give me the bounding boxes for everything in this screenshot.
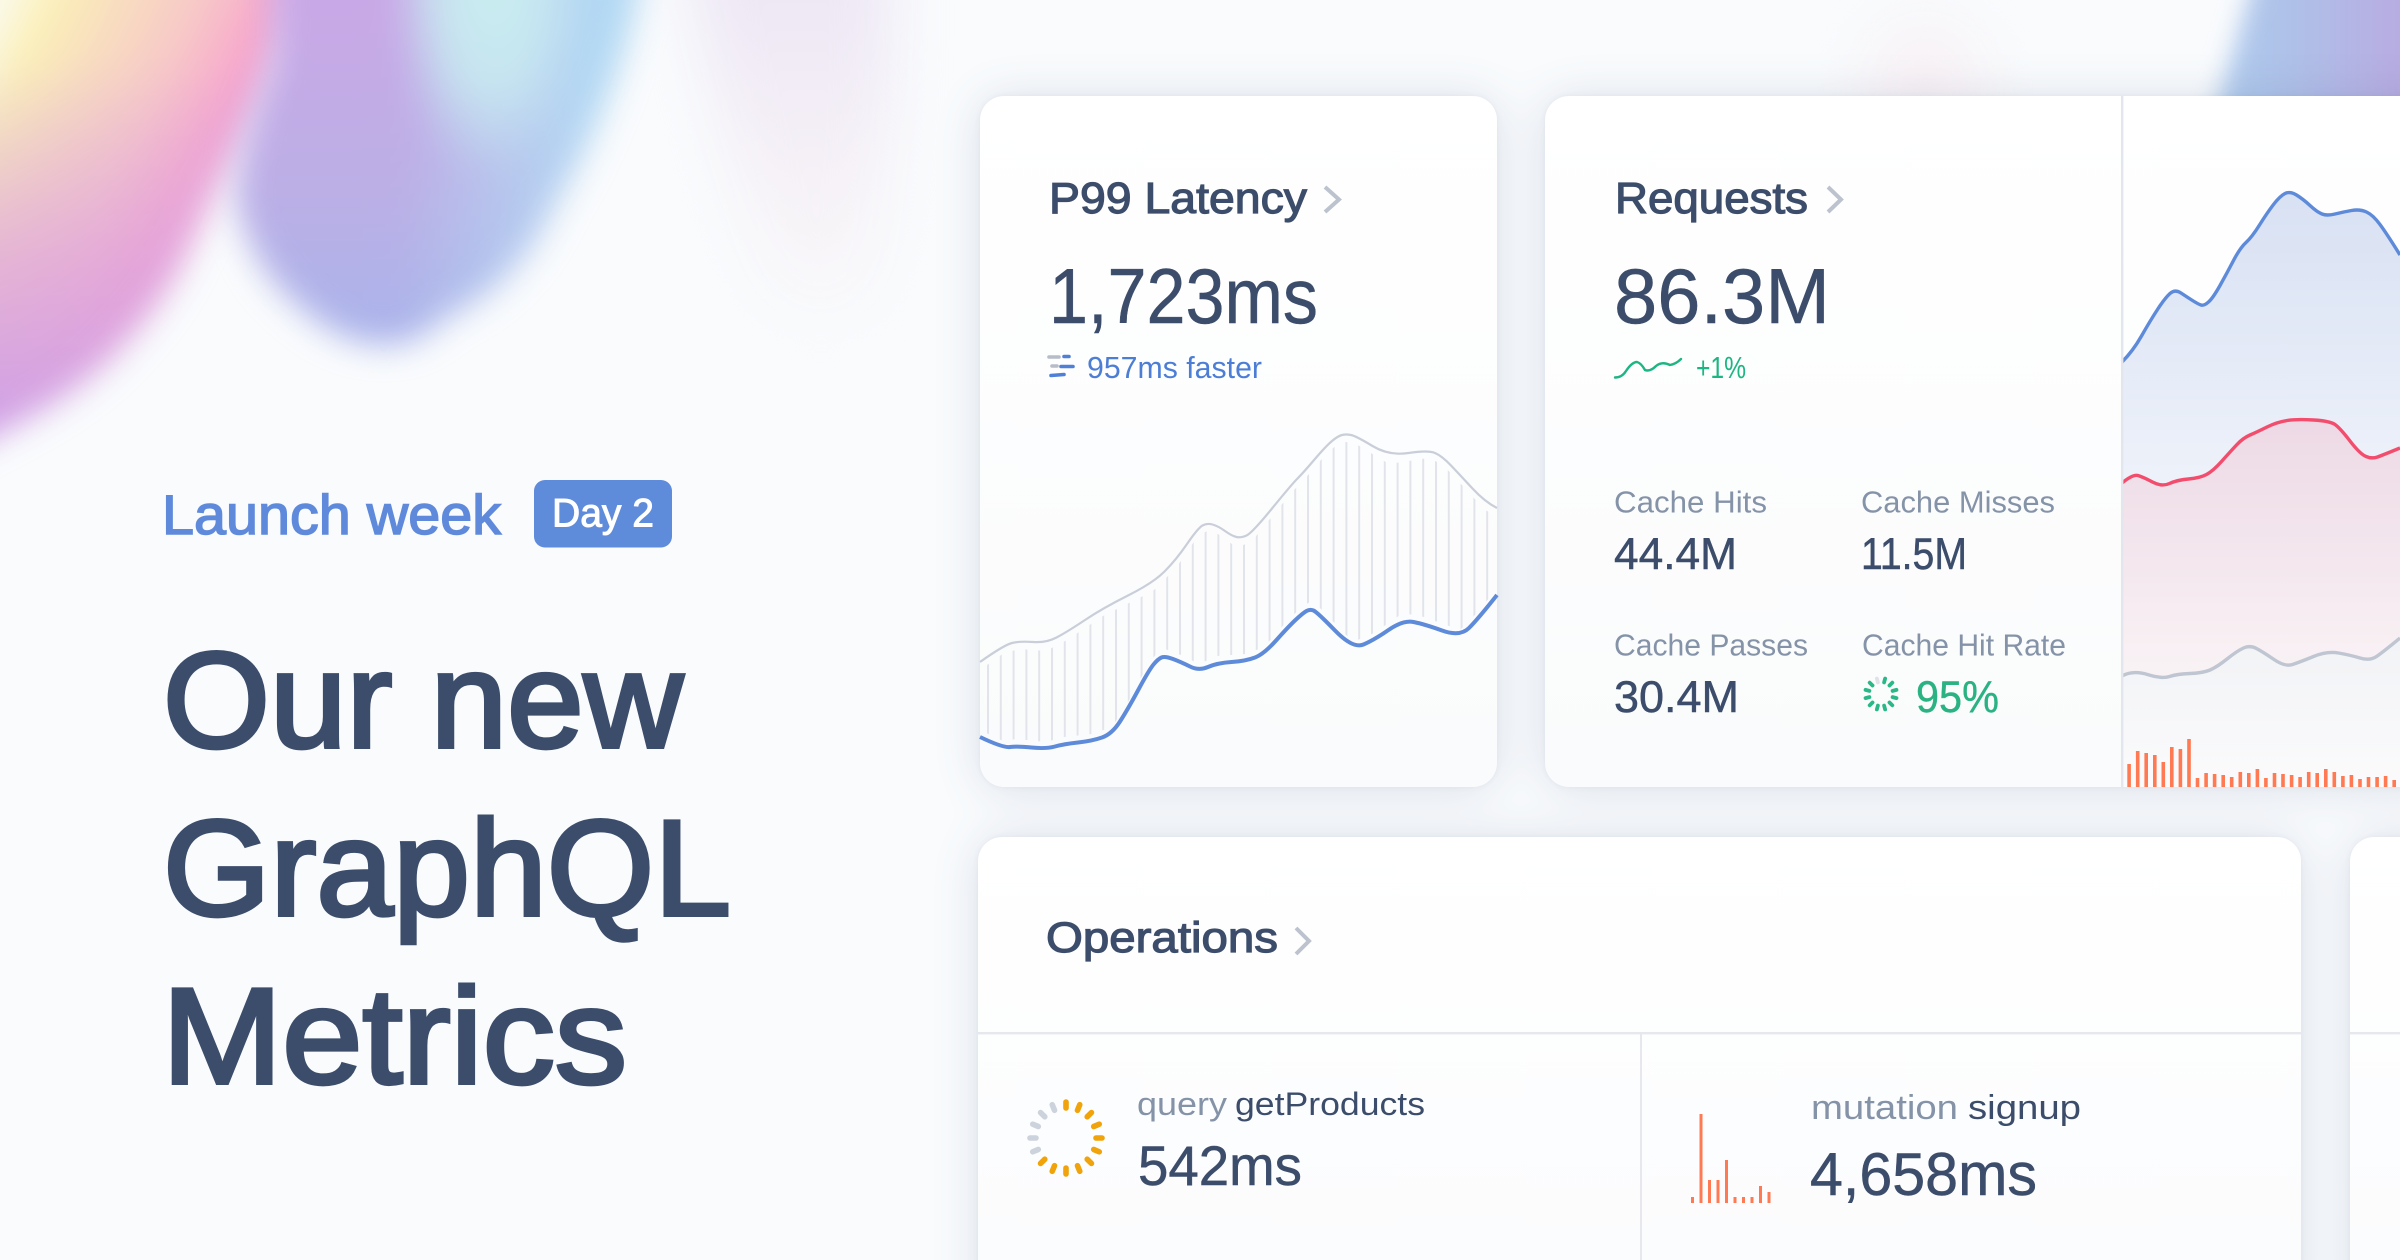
panel: operations bbox=[978, 837, 2301, 1260]
metric: cache passes: Cache Passes bbox=[1614, 628, 1808, 663]
panel: requests bbox=[1545, 96, 2400, 787]
stat: 4,658ms: 4,658ms bbox=[1810, 1141, 2037, 1208]
metric: cache hits bbox=[1614, 485, 1767, 579]
heading: operations: Operations bbox=[1046, 914, 1278, 962]
title: GraphQL bbox=[163, 792, 731, 944]
metric: cache misses bbox=[1861, 485, 2055, 579]
title: Our new bbox=[163, 624, 684, 776]
operation name: query getProducts: getProducts bbox=[1235, 1086, 1425, 1122]
heading: requests: Requests bbox=[1615, 174, 1808, 223]
operation name: query getProducts: query bbox=[1137, 1086, 1227, 1122]
chart: requests area bbox=[2122, 193, 2400, 787]
title bbox=[162, 624, 731, 1112]
metric: cache hits: 44.4M bbox=[1614, 530, 1737, 579]
operation name: query getProducts bbox=[1137, 1086, 1425, 1122]
delta: plus one percent: +1% bbox=[1696, 350, 1746, 385]
title: Metrics bbox=[162, 960, 627, 1112]
eyebrow: launch week: Launch week bbox=[162, 483, 502, 546]
metric: cache misses: 11.5M bbox=[1861, 530, 1967, 579]
gradient blob: blue and purple top right bbox=[2195, 0, 2400, 180]
operation name: mutation signup: signup bbox=[1968, 1089, 2081, 1127]
metric: cache misses: Cache Misses bbox=[1861, 485, 2055, 520]
operation name: mutation signup bbox=[1811, 1089, 2081, 1127]
gradient blob: faint pink above requests card bbox=[1865, 20, 1985, 160]
icon: green sparkline bbox=[1615, 359, 1681, 378]
stat: latency value: 1,723ms bbox=[1049, 252, 1318, 340]
gradient blob: rainbow swoosh top left bbox=[0, 0, 306, 470]
operation name: mutation signup: mutation bbox=[1811, 1089, 1958, 1127]
stat: requests value: 86.3M bbox=[1614, 252, 1830, 340]
icon: latency spinner bbox=[1030, 1102, 1102, 1174]
panel: p99 latency bbox=[980, 96, 1497, 787]
bar chart: signup durations bbox=[1691, 1114, 1770, 1203]
card shadows bbox=[978, 96, 2400, 1260]
gradient blob: purple and blue tongue bbox=[236, 0, 645, 345]
panel: next card cropped at right edge bbox=[2350, 837, 2400, 1260]
gradient blob: faint lavender bbox=[680, 0, 892, 308]
icon: chevron bbox=[1296, 928, 1309, 954]
icon: hit rate spinner bbox=[1866, 679, 1896, 709]
badge: day 2 bbox=[534, 480, 672, 548]
metric: cache hit rate: Cache Hit Rate bbox=[1862, 628, 2066, 663]
delta: 957ms faster: 957ms faster bbox=[1087, 350, 1262, 385]
stat: 95 percent: 95% bbox=[1916, 673, 1999, 722]
icon: chevron bbox=[1828, 187, 1841, 212]
bar chart: orange request bars bbox=[2127, 739, 2396, 787]
chart: latency band bbox=[980, 420, 1497, 760]
badge: day 2: Day 2 bbox=[552, 492, 654, 536]
heading: p99 latency: P99 Latency bbox=[1049, 174, 1307, 223]
metric: cache passes: 30.4M bbox=[1614, 673, 1739, 722]
icon: speed lines bbox=[1049, 356, 1073, 376]
icon: chevron bbox=[1325, 187, 1339, 212]
stat: 542ms: 542ms bbox=[1138, 1134, 1302, 1197]
metric: cache hits: Cache Hits bbox=[1614, 485, 1767, 520]
metric: cache passes bbox=[1614, 628, 1808, 722]
metric: cache hit rate bbox=[1862, 628, 2066, 722]
